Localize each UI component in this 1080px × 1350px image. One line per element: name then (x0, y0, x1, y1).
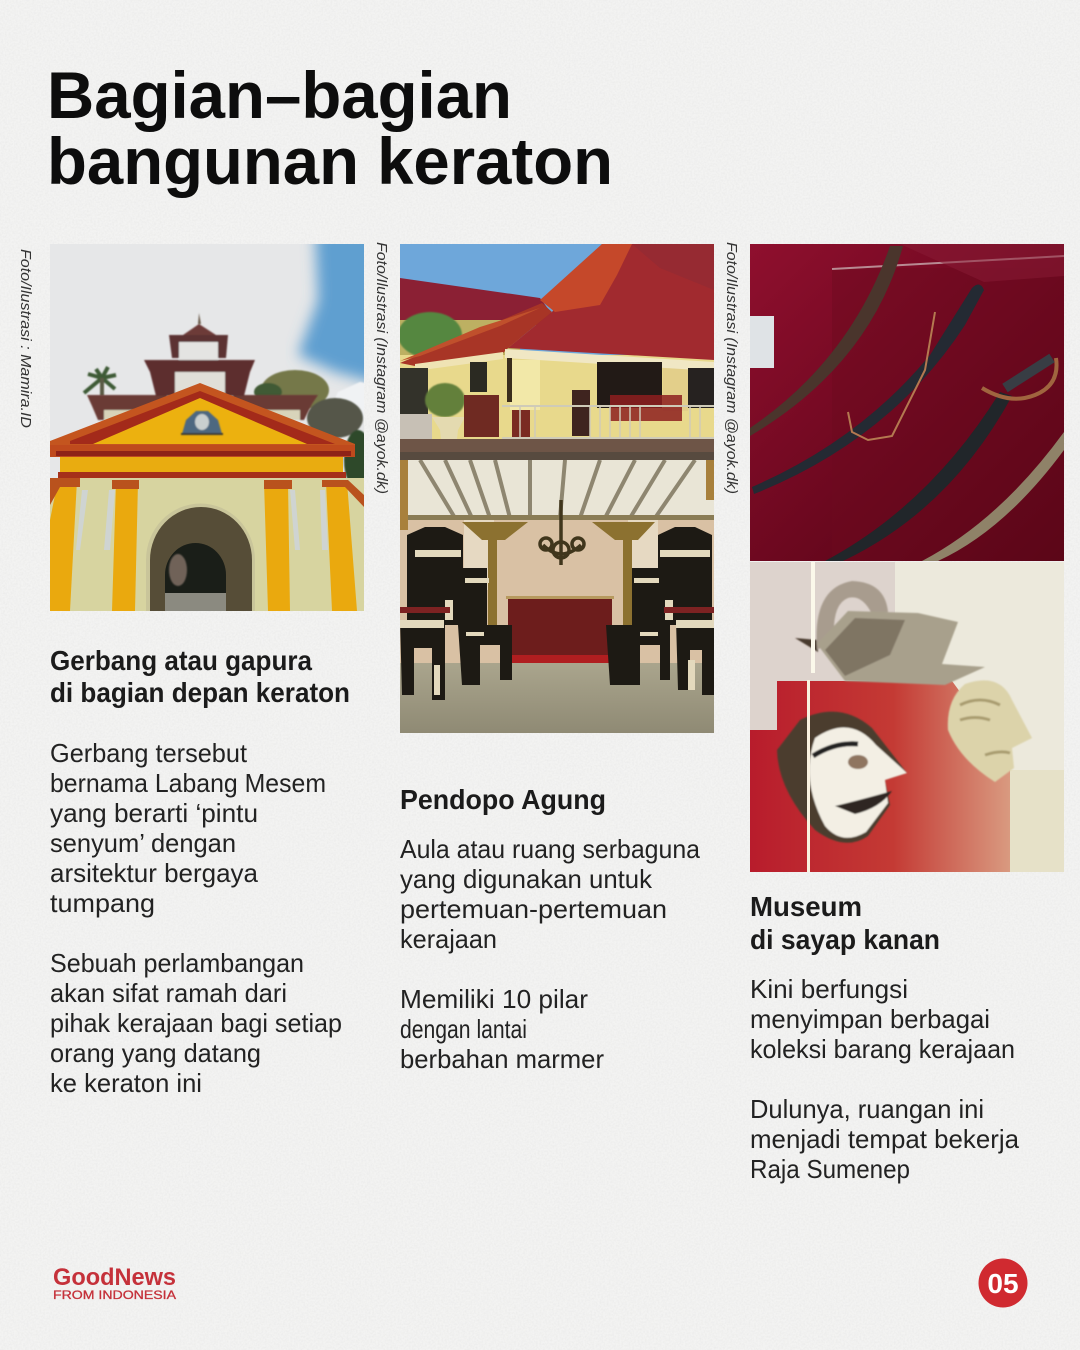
page number badge (978, 1258, 1028, 1308)
tower (87, 313, 318, 420)
photo credit: column 2: Foto/Ilustrasi (Instagram @ayok.dk) (373, 242, 390, 494)
column 1: body text: akan sifat ramah dari (50, 978, 287, 1008)
column 1: body text: Gerbang tersebut (50, 738, 248, 768)
sword 4 (922, 432, 1064, 561)
terrace edge (400, 439, 714, 452)
red plinth (750, 681, 1010, 872)
mask right (948, 680, 1032, 782)
top wayang crown (795, 581, 985, 685)
column 3: heading (750, 891, 940, 955)
trees (82, 365, 364, 478)
ceiling (400, 460, 714, 518)
title: bangunan keraton (47, 124, 613, 198)
scalloped fringes (505, 349, 714, 371)
chairs (400, 527, 714, 700)
column 3: heading: di sayap kanan (750, 924, 940, 955)
emblem (181, 411, 223, 435)
page number badge: 05 (987, 1268, 1019, 1299)
column 1: body text (50, 738, 342, 1098)
column 2: body text: Memiliki 10 pilar (400, 984, 588, 1014)
photo: gate of the keraton (50, 244, 364, 611)
column 2: body text: pertemuan-pertemuan (400, 894, 667, 924)
column 1: heading: Gerbang atau gapura (50, 645, 312, 676)
column 1: body text: ke keraton ini (50, 1068, 202, 1098)
column 1: heading (50, 645, 350, 708)
windows (597, 362, 662, 408)
railing (502, 406, 714, 438)
photo credit: column 3: Foto/Ilustrasi (Instagram @ayok.dk) (723, 242, 740, 494)
ground and planter (400, 414, 432, 440)
upper roof (508, 244, 714, 360)
column 3: body text: koleksi barang kerajaan (750, 1034, 1015, 1064)
column 1: body text: bernama Labang Mesem (50, 768, 326, 798)
pillars and brackets (462, 522, 528, 625)
sword 3 (825, 392, 1012, 561)
column 1: body text: arsitektur bergaya (50, 858, 259, 888)
logo: GoodNews from Indonesia: GoodNews (53, 1264, 176, 1291)
photo: museum wayang masks (750, 562, 1064, 872)
column 1: heading: di bagian depan keraton (50, 677, 350, 708)
archway (146, 504, 255, 611)
title (47, 58, 613, 198)
facade (50, 478, 364, 611)
chandelier (540, 500, 584, 565)
column 1: body text: orang yang datang (50, 1038, 261, 1068)
column 3: body text: menyimpan berbagai (750, 1004, 990, 1034)
column 2: body text: Aula atau ruang serbaguna (400, 834, 701, 864)
column 1: body text: tumpang (50, 888, 155, 918)
column 2: body text: kerajaan (400, 924, 497, 954)
back wall carpet (508, 597, 612, 655)
column 1: body text: pihak kerajaan bagi setiap (50, 1008, 342, 1038)
column 3: body text: Kini berfungsi (750, 974, 908, 1004)
column 3: heading: Museum (750, 891, 862, 922)
column 2: heading: Pendopo Agung (400, 784, 606, 815)
lower left roof (400, 303, 552, 366)
column 2: body text: yang digunakan untuk (400, 864, 653, 894)
photo: Pendopo Agung interior (400, 460, 714, 733)
walls (400, 355, 714, 440)
column 3: body text: Raja Sumenep (750, 1154, 910, 1184)
sword 2 (752, 284, 984, 494)
title: Bagian–bagian (47, 58, 512, 132)
photo: museum swords (750, 244, 1064, 568)
photo credit: column 1: Foto/Ilustrasi : Mamira.ID (17, 249, 34, 428)
column 2: body text: dengan lantai (400, 1014, 527, 1044)
column 1: body text: senyum’ dengan (50, 828, 236, 858)
column 2: body text: berbahan marmer (400, 1044, 604, 1074)
column 3: body text (750, 974, 1020, 1184)
mask left (777, 712, 907, 843)
column 1: body text: Sebuah perlambangan (50, 948, 304, 978)
column 3: body text: menjadi tempat bekerja (750, 1124, 1020, 1154)
column 2: body text (400, 834, 701, 1074)
photo: Pendopo Agung exterior (398, 244, 714, 460)
columns (50, 480, 77, 611)
logo: GoodNews from Indonesia: FROM INDONESIA (53, 1288, 176, 1302)
column 1: body text: yang berarti ‘pintu (50, 798, 258, 828)
column 3: body text: Dulunya, ruangan ini (750, 1094, 984, 1124)
sword 1 (750, 246, 903, 436)
chairs (464, 395, 499, 437)
